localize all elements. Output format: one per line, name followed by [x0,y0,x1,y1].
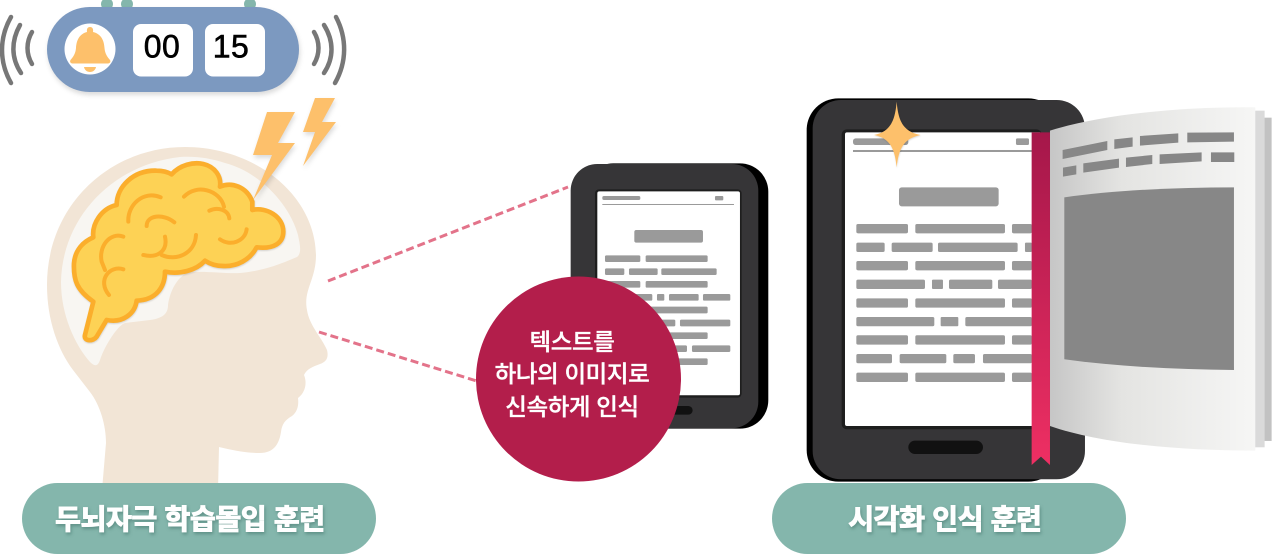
icon: large lightning bolt [253,112,295,200]
head inner highlight [61,157,300,365]
timer seconds: 15 [213,28,249,64]
large e-reader with book [807,98,1272,482]
dashed connector: upper [328,187,568,281]
label pill: visual recognition training: 시각화 인식 훈련 [848,498,1042,538]
timer panel [47,7,299,92]
icon: right sound waves [314,17,344,83]
tablet screen text [853,138,1033,382]
callout text: 텍스트를 [530,323,614,357]
icon: alarm bell knobs [101,0,256,10]
icon: left sound waves [2,17,32,83]
label pill: brain training: 두뇌자극 학습몰입 훈련 [55,498,325,538]
label pill: visual recognition training [772,483,1126,554]
icon: small lightning bolt [303,98,336,166]
timer minutes: 00 [144,28,180,64]
icon: bell [64,24,116,74]
callout text: 신속하게 인식 [505,388,639,422]
timer pill background [47,7,299,92]
book pages [1050,107,1272,451]
icon: brain [74,163,283,340]
tablet body [807,98,1085,482]
bookmark ribbon [1032,132,1050,465]
callout circle [476,276,681,482]
head illustration [47,98,336,490]
icon: sparkle star [874,102,921,167]
timer minutes [133,24,193,76]
small e-reader tablet [571,163,768,429]
label pill: brain training [22,483,376,554]
callout text: 하나의 이미지로 [495,355,649,389]
timer seconds [205,24,265,76]
head silhouette [47,147,328,490]
dashed connector: lower [319,332,480,382]
